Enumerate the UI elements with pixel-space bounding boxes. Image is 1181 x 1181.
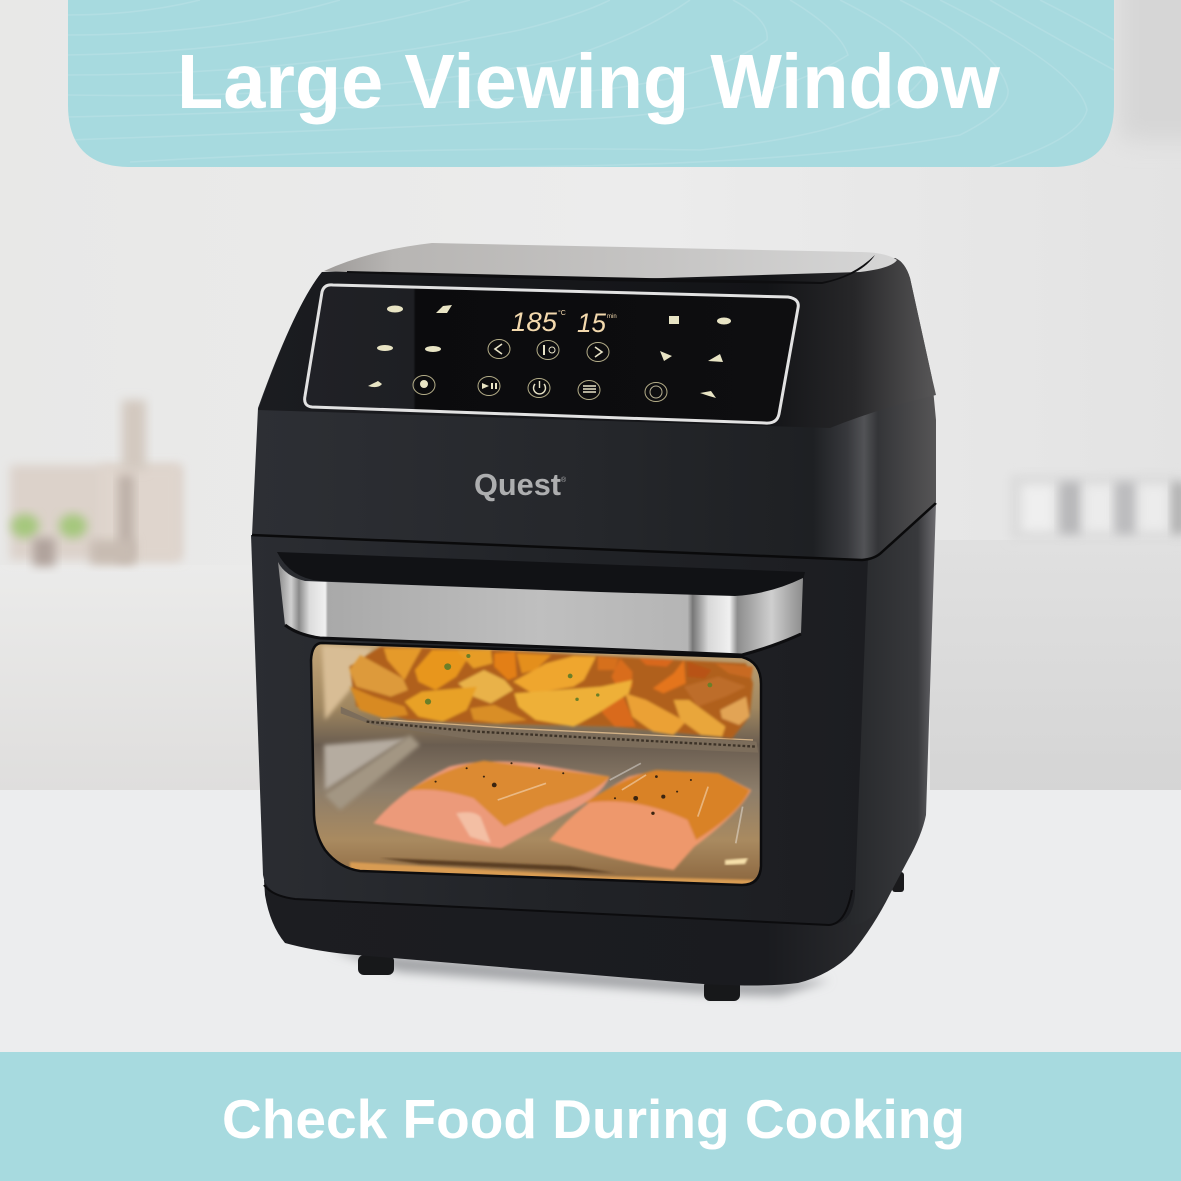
oven rack and tray bbox=[341, 707, 758, 753]
potato wedges bbox=[349, 647, 753, 738]
fryer feet bbox=[358, 872, 904, 1001]
window inner reflections bbox=[322, 645, 372, 720]
counter top bbox=[0, 790, 1181, 1052]
door handle bbox=[278, 562, 803, 654]
temperature and timer display: °C bbox=[558, 309, 566, 317]
control panel bbox=[305, 285, 798, 423]
fryer base bbox=[264, 880, 892, 986]
heading: Large Viewing Window bbox=[177, 39, 1001, 125]
viewing window bbox=[305, 640, 765, 890]
upper body band bbox=[252, 258, 936, 560]
bottom band bbox=[0, 1052, 1181, 1181]
background: blurred kitchen bbox=[0, 0, 1181, 800]
temperature and timer display: 15 bbox=[577, 308, 607, 338]
temperature and timer display: 185 bbox=[511, 307, 558, 337]
food preset icons bbox=[368, 305, 731, 398]
banner contour pattern bbox=[68, 0, 1114, 167]
salmon fillets bbox=[374, 761, 751, 870]
food drawn in enlarged coordinates bbox=[341, 647, 758, 870]
air fryer: ® bbox=[561, 476, 567, 484]
window frame bbox=[311, 643, 761, 885]
lower body side bbox=[845, 503, 936, 925]
top banner bbox=[68, 0, 1114, 167]
logo: Quest bbox=[474, 467, 561, 502]
upper top surface bbox=[258, 258, 936, 428]
temperature and timer display bbox=[511, 307, 617, 338]
lower body front bbox=[251, 535, 868, 925]
touch buttons bbox=[413, 340, 667, 402]
air fryer bbox=[251, 243, 936, 1001]
caption: Check Food During Cooking bbox=[222, 1088, 965, 1150]
glass glare bbox=[498, 763, 743, 843]
temperature and timer display: min bbox=[607, 314, 617, 320]
base seam bbox=[264, 885, 852, 925]
lid plate bbox=[324, 243, 897, 280]
door handle recess bbox=[277, 552, 805, 596]
fryer shadow bbox=[330, 950, 830, 996]
pepper specks bbox=[435, 762, 692, 815]
